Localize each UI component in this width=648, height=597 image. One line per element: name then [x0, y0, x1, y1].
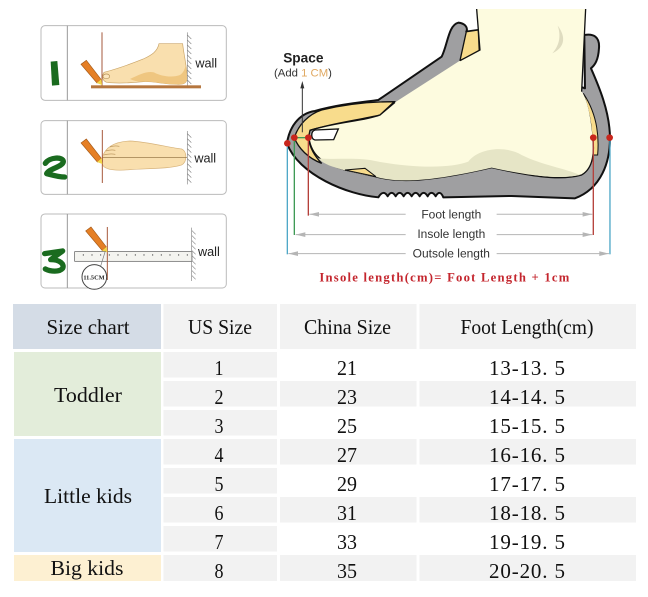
row 4: 16-16. 5: [489, 443, 565, 467]
dimension: insole length: Insole length: [417, 227, 485, 241]
row 2: 23: [337, 385, 357, 409]
panel: step 1: [41, 26, 226, 100]
label: wall: wall: [193, 151, 216, 165]
icon: number 1: [51, 61, 59, 86]
category: Toddler: [14, 352, 161, 436]
row 6: 6: [214, 501, 224, 525]
row 2: 14-14. 5: [489, 385, 565, 409]
table: size chart: [13, 304, 636, 583]
row 1: [164, 352, 565, 380]
row 1: 21: [337, 356, 357, 380]
label: wall: wall: [197, 245, 220, 259]
row 2: [164, 381, 636, 409]
toe lining: [294, 102, 394, 163]
dimension: insole length: [296, 227, 592, 241]
table header: China Size: [304, 315, 391, 339]
dimension: outsole length: [288, 246, 609, 260]
row 7: 7: [214, 530, 224, 554]
callout: 11.5CM: [82, 265, 107, 289]
label: add 1 cm: (Add 1 CM): [274, 67, 332, 79]
wall: [187, 32, 191, 86]
row 6: 31: [337, 501, 357, 525]
toe gap: [312, 129, 338, 140]
icon: pencil: [86, 227, 107, 252]
category: Big kids: [14, 555, 161, 581]
measure points: [284, 134, 613, 147]
row 7: [164, 526, 565, 554]
dimension: outsole length: Outsole length: [413, 246, 490, 260]
row 4: 4: [214, 443, 224, 467]
table header: Size chart: [46, 315, 130, 339]
panel: step 2: [41, 121, 226, 194]
dimension: foot length: [309, 207, 592, 221]
arch lining: [345, 168, 376, 177]
table header: Foot Length(cm): [460, 315, 594, 339]
table header: US Size: [188, 315, 252, 339]
panel: measuring steps: [41, 26, 226, 289]
arrow: space: [300, 81, 304, 132]
table header: [13, 304, 636, 349]
collar lining: [460, 30, 479, 61]
row 7: 19-19. 5: [489, 530, 565, 554]
icon: number 3: [45, 251, 63, 271]
diagram: shoe cross-section: [274, 9, 613, 285]
panel: step 3: [41, 214, 226, 289]
row 7: 33: [337, 530, 357, 554]
category: Toddler: Toddler: [54, 383, 122, 407]
formula: Insole length(cm)= Foot Length + 1cm: [319, 271, 570, 285]
icon: foot side view: [103, 44, 187, 84]
row 1: 1: [214, 356, 224, 380]
icon: foot top view: [103, 141, 186, 170]
row 8: [164, 555, 636, 583]
ankle bone: [552, 26, 563, 53]
row 2: 2: [214, 385, 224, 409]
row 5: 29: [337, 472, 357, 496]
foot: [309, 9, 593, 180]
row 1: 13-13. 5: [489, 356, 565, 380]
icon: number 2: [45, 158, 65, 177]
row 4: [164, 439, 636, 467]
icon: pencil: [81, 60, 102, 85]
heel lining: [583, 93, 598, 155]
row 5: 17-17. 5: [489, 472, 565, 496]
dimension: foot length: Foot length: [421, 207, 481, 221]
icon: pencil: [81, 139, 102, 164]
measure lines: [287, 138, 610, 254]
row 5: 5: [214, 472, 224, 496]
category: Little kids: Little kids: [44, 484, 132, 508]
row 8: 20-20. 5: [489, 559, 565, 583]
row 5: [164, 468, 565, 496]
row 3: [164, 410, 565, 438]
sole shading: [318, 149, 580, 180]
row 8: 8: [214, 559, 224, 583]
label: wall: wall: [194, 56, 217, 70]
row 6: [164, 497, 636, 525]
callout: 11.5CM: 11.5CM: [83, 274, 105, 281]
category: Little kids: [14, 439, 161, 552]
row 6: 18-18. 5: [489, 501, 565, 525]
row 3: 25: [337, 414, 357, 438]
icon: ruler: [75, 252, 192, 261]
category: Big kids: Big kids: [50, 556, 124, 580]
heading: space: Space: [283, 50, 324, 65]
shoe sole and upper: [287, 23, 610, 198]
row 3: 15-15. 5: [489, 414, 565, 438]
row 3: 3: [214, 414, 224, 438]
row 4: 27: [337, 443, 357, 467]
row 8: 35: [337, 559, 357, 583]
